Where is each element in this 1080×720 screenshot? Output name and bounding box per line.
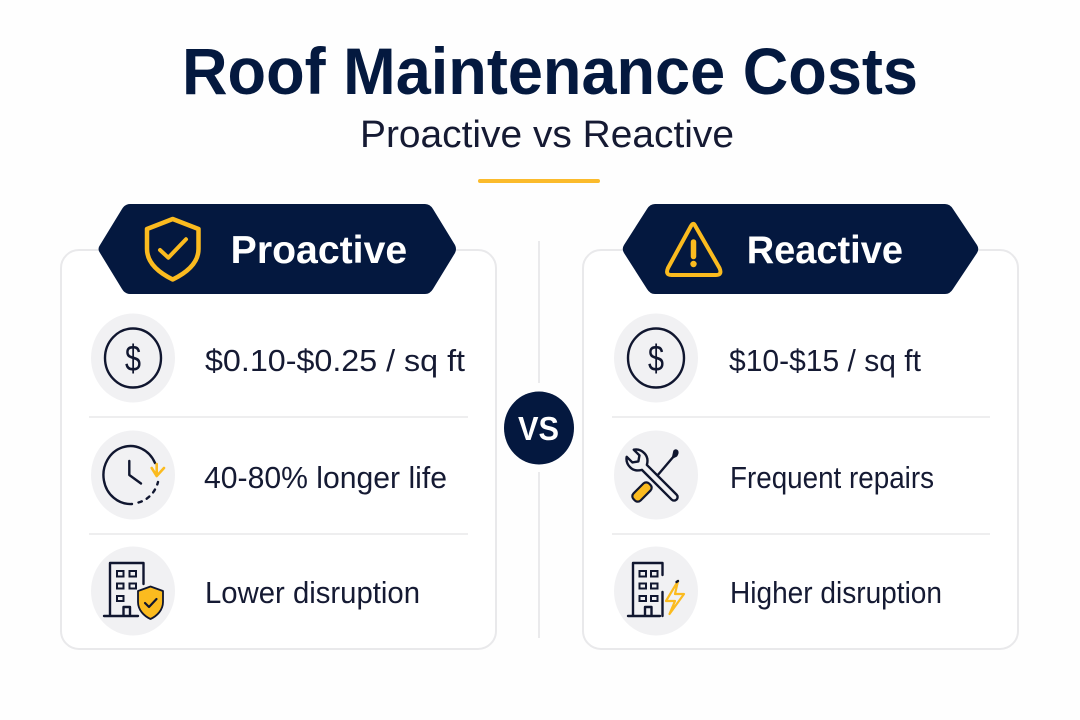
row: reactive disruption bbox=[614, 546, 942, 636]
proactive heading: Proactive bbox=[231, 229, 407, 272]
row: proactive cost bbox=[91, 314, 465, 402]
proactive lifespan text: 40-80% longer life bbox=[204, 460, 447, 495]
row: proactive disruption bbox=[91, 546, 420, 636]
proactive cost text: $0.10-$0.25 / sq ft bbox=[205, 343, 465, 378]
row: reactive cost bbox=[614, 314, 921, 402]
icon: clock with arrow bbox=[103, 446, 164, 504]
icon: shield with check bbox=[147, 219, 198, 280]
icon: warning triangle bbox=[667, 224, 720, 275]
panel: reactive bbox=[583, 204, 1018, 649]
icon: dollar coin bbox=[105, 328, 161, 388]
panel: proactive bbox=[61, 204, 496, 649]
proactive header ribbon bbox=[98, 204, 456, 294]
icon: building with shield bbox=[104, 563, 163, 619]
reactive header ribbon bbox=[623, 204, 978, 294]
center divider line bbox=[538, 241, 540, 638]
row: proactive lifespan bbox=[91, 430, 447, 520]
icon: building with lightning bolt bbox=[628, 563, 684, 616]
row: reactive repairs bbox=[614, 430, 934, 520]
reactive cost text: $10-$15 / sq ft bbox=[729, 343, 921, 378]
icon: crossed wrench and screwdriver bbox=[623, 446, 684, 507]
title accent bar bbox=[478, 179, 600, 183]
proactive disruption text: Lower disruption bbox=[205, 575, 420, 610]
icon: dollar coin: $ bbox=[648, 338, 664, 379]
vs badge: VS bbox=[518, 410, 559, 447]
reactive heading: Reactive bbox=[747, 229, 903, 272]
title: Roof Maintenance Costs bbox=[182, 34, 918, 108]
reactive disruption text: Higher disruption bbox=[730, 575, 942, 610]
icon: dollar coin: $ bbox=[125, 338, 141, 379]
vs badge bbox=[504, 392, 574, 464]
subtitle: Proactive vs Reactive bbox=[360, 114, 734, 156]
icon: dollar coin bbox=[628, 328, 684, 388]
reactive repairs text: Frequent repairs bbox=[730, 460, 934, 495]
